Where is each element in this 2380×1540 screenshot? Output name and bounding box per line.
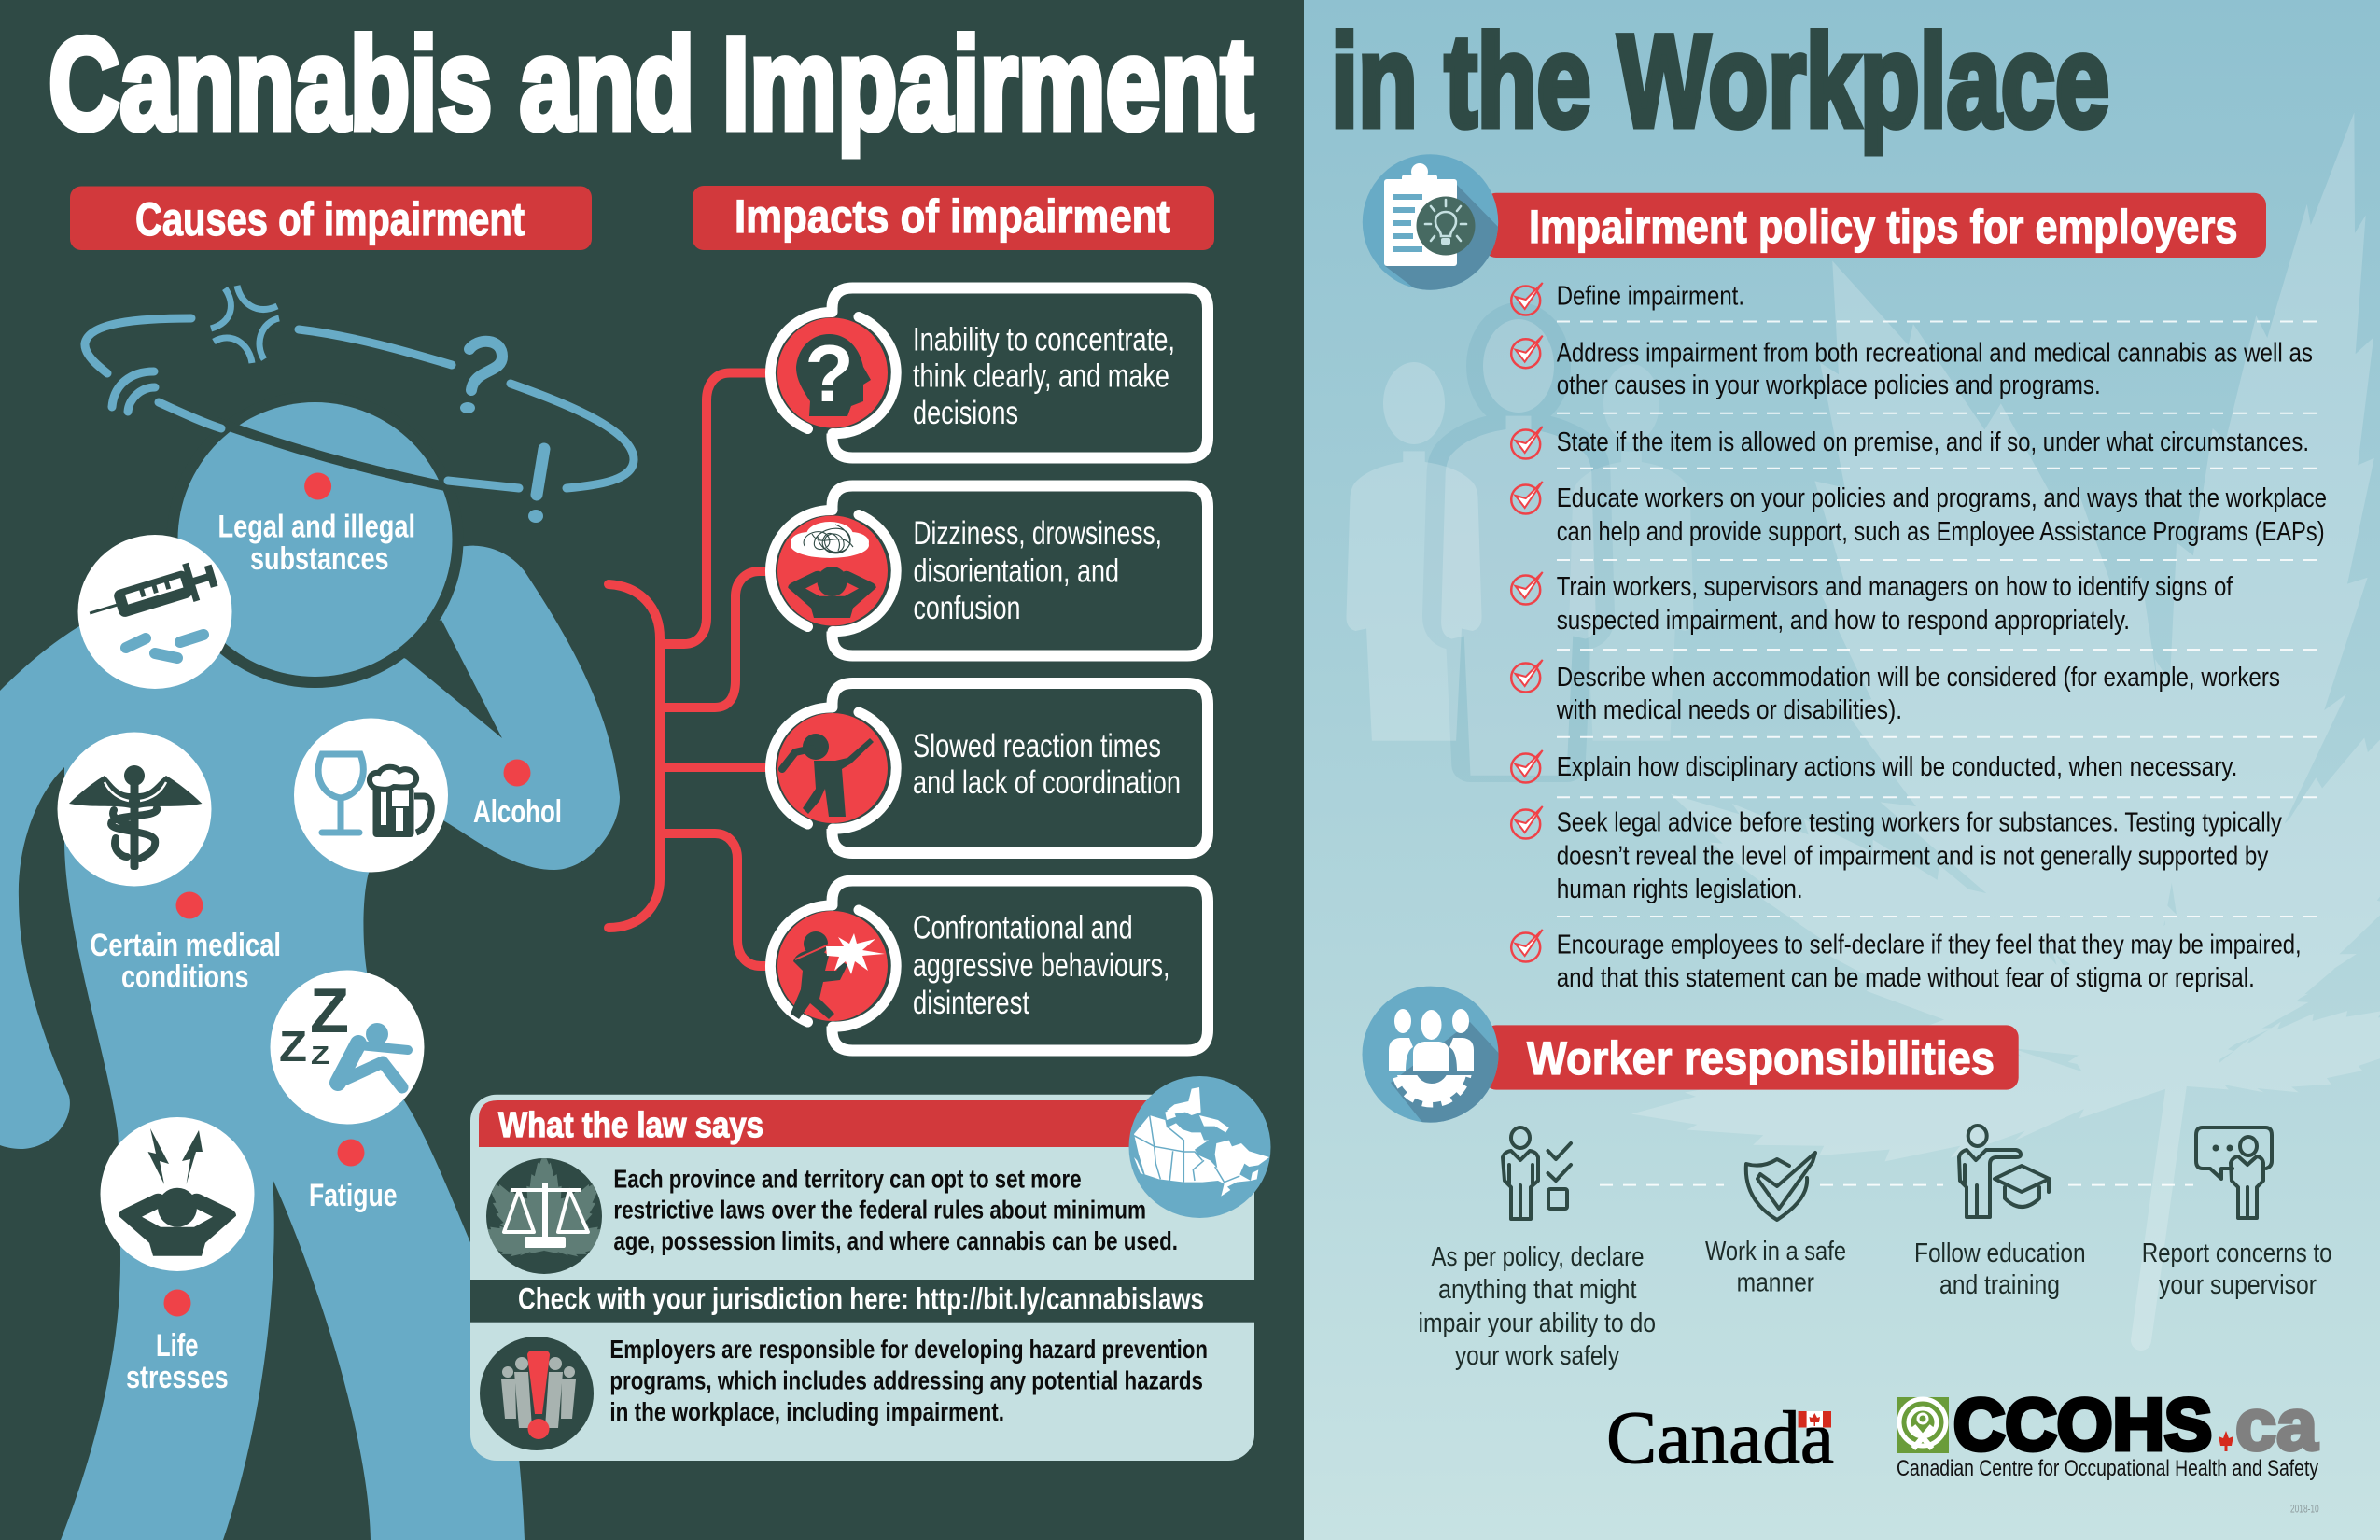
tip 8: human rights legislation. — [1557, 875, 1803, 904]
impact: slowed reaction times: Slowed reaction times — [913, 728, 1161, 764]
heading: what the law says — [479, 1100, 1157, 1147]
cause: legal and illegal substances: substances — [250, 541, 388, 577]
tip 5: suspected impairment, and how to respond appropriately. — [1557, 606, 2130, 636]
impact: inability to concentrate: think clearly, and make — [913, 358, 1169, 395]
impact: inability to concentrate: decisions — [913, 395, 1018, 431]
dizziness halo — [85, 286, 634, 523]
background worker silhouettes — [1346, 319, 1694, 776]
impact: dizziness: disorientation, and — [913, 553, 1119, 589]
panel: dark left background — [0, 0, 1304, 1540]
heading: impacts of impairment: Impacts of impairment — [735, 190, 1170, 243]
cause: legal and illegal substances — [78, 472, 415, 689]
icon: canada map — [1129, 1076, 1271, 1218]
icon: caduceus — [69, 765, 202, 870]
impact: dizziness: confusion — [913, 590, 1021, 626]
icon: person with checklist — [1503, 1127, 1571, 1219]
cause: fatigue: Fatigue — [309, 1178, 398, 1213]
impact: confrontational behaviours: aggressive behaviours, — [913, 947, 1170, 984]
tip 6 — [1511, 660, 2280, 725]
responsibility: declare: As per policy, declare — [1432, 1242, 1645, 1272]
worker responsibilities row — [1419, 1126, 2332, 1371]
date code: 2018-10 — [2290, 1503, 2319, 1516]
icon: sleeping person — [279, 975, 408, 1087]
title: in the Workplace — [1331, 7, 2109, 154]
logo: canada wordmark: Canada — [1606, 1397, 1834, 1479]
impact: dizziness — [770, 485, 1208, 655]
tip 9: and that this statement can be made without fear of stigma or reprisal. — [1557, 963, 2255, 993]
icon: confused person with scribble cloud — [788, 522, 876, 618]
connector lines — [609, 373, 775, 966]
responsibility: education: and training — [1939, 1270, 2060, 1300]
icon: clipboard with light bulb — [1363, 154, 1505, 299]
tip 6: with medical needs or disabilities). — [1556, 695, 1902, 725]
heading: impairment policy tips for employers — [1363, 154, 2266, 299]
cause: certain medical conditions: Certain medical — [90, 928, 281, 963]
responsibility: declare: impair your ability to do — [1419, 1309, 1656, 1338]
icon: syringe and pills — [84, 556, 220, 658]
tip 8 — [1511, 806, 2282, 904]
cause: life stresses: stresses — [126, 1360, 229, 1395]
jurisdiction link strip — [470, 1280, 1254, 1323]
icon: scales of justice on leaf — [486, 1158, 602, 1274]
law text: provincial rules: restrictive laws over the federal rules about minimum — [613, 1196, 1146, 1225]
heading: what the law says: What the law says — [498, 1106, 763, 1145]
cause: certain medical conditions — [58, 732, 281, 995]
cause: alcohol: Alcohol — [473, 794, 562, 830]
impact: slowed reaction times — [770, 683, 1208, 853]
responsibility: declare: your work safely — [1455, 1341, 1619, 1371]
icon: head with question mark — [796, 329, 871, 419]
icon: head with question mark: ? — [805, 329, 854, 419]
icon: person punching with burst — [791, 931, 885, 1019]
law text: provincial rules — [613, 1165, 1178, 1255]
panel: light right background — [1304, 0, 2380, 1540]
law text: provincial rules: Each province and territory can opt to set more — [613, 1165, 1082, 1194]
tip 5: Train workers, supervisors and managers on how to identify signs of — [1557, 572, 2233, 602]
icon: shield with check — [1746, 1153, 1815, 1220]
panel: what the law says — [469, 1076, 1271, 1461]
cause: fatigue — [271, 971, 424, 1213]
icon: person with speech bubble — [2196, 1127, 2272, 1218]
responsibility: education: Follow education — [1914, 1239, 2086, 1268]
tip 9 — [1511, 930, 2302, 993]
responsibility: education — [1914, 1126, 2086, 1300]
impact: inability to concentrate: Inability to concentrate, — [913, 321, 1175, 357]
cause: certain medical conditions: conditions — [121, 959, 248, 995]
icon: sleeping person: Z — [279, 1022, 307, 1071]
icon: sleeping person: Z — [310, 975, 349, 1046]
responsibility: report concerns: Report concerns to — [2142, 1239, 2332, 1268]
responsibility: declare — [1419, 1127, 1656, 1371]
responsibility: report concerns — [2142, 1127, 2332, 1300]
tip 1: Define impairment. — [1557, 282, 1744, 312]
law text: employer responsibility: in the workplace, including impairment. — [609, 1397, 1004, 1426]
heading: worker responsibilities — [1363, 987, 2019, 1129]
responsibility: work safely: manner — [1737, 1268, 1814, 1298]
jurisdiction link strip: Check with your jurisdiction here: http://bit.ly/cannabislaws — [518, 1282, 1204, 1316]
icon: sleeping person: Z — [311, 1041, 329, 1070]
cause: alcohol — [294, 719, 562, 872]
responsibility: report concerns: your supervisor — [2159, 1270, 2317, 1300]
icon: stressed person — [119, 1128, 236, 1256]
tip 2: other causes in your workplace policies and programs. — [1557, 371, 2101, 400]
icon: person with graduation cap — [1959, 1126, 2050, 1217]
impact: slowed reaction times: and lack of coordination — [913, 764, 1181, 801]
responsibility: declare: anything that might — [1438, 1275, 1637, 1305]
cause: life stresses: Life — [156, 1328, 198, 1364]
icon: workers and gear — [1363, 987, 1505, 1129]
heading: causes of impairment — [70, 187, 592, 250]
tip 5 — [1511, 572, 2233, 636]
icon: stumbling person — [782, 734, 874, 817]
body figure — [0, 391, 620, 1540]
impact: confrontational behaviours — [770, 881, 1208, 1051]
cause: legal and illegal substances: Legal and illegal — [218, 510, 415, 545]
tip 7: Explain how disciplinary actions will be conducted, when necessary. — [1557, 752, 2237, 782]
logo: CCOHS: ca — [2235, 1383, 2318, 1465]
tip 4 — [1511, 482, 2327, 547]
tip 2 — [1511, 336, 2313, 400]
logo: CCOHS: CCOHS — [1953, 1383, 2212, 1465]
checklist: policy tips — [1511, 282, 2327, 993]
law text: provincial rules: age, possession limits, and where cannabis can be used. — [613, 1226, 1178, 1255]
law text: employer responsibility — [609, 1335, 1208, 1426]
cause: life stresses — [101, 1117, 254, 1395]
title: Cannabis and Impairment — [49, 10, 1253, 157]
responsibility: work safely — [1705, 1153, 1846, 1298]
impact: dizziness: Dizziness, drowsiness, — [913, 515, 1162, 552]
law text: employer responsibility: Employers are responsible for developing hazard prevention — [609, 1335, 1208, 1364]
impact: confrontational behaviours: disinterest — [913, 985, 1029, 1021]
tip 1 — [1511, 282, 1744, 315]
heading: worker responsibilities: Worker responsibilities — [1527, 1032, 1995, 1085]
background cannabis leaf — [1628, 95, 2380, 1340]
impact: confrontational behaviours: Confrontational and — [913, 910, 1133, 946]
heading: impairment policy tips for employers: Impairment policy tips for employers — [1529, 201, 2238, 253]
logo: CCOHS — [1897, 1383, 2318, 1481]
impact: inability to concentrate — [770, 287, 1208, 457]
responsibility: work safely: Work in a safe — [1705, 1237, 1846, 1267]
icon: wine glass and beer mug — [318, 754, 431, 837]
icon: workers with warning mark — [480, 1337, 594, 1450]
law text: employer responsibility: programs, which includes addressing any potential hazards — [609, 1366, 1203, 1395]
heading: causes of impairment: Causes of impairment — [135, 193, 525, 245]
